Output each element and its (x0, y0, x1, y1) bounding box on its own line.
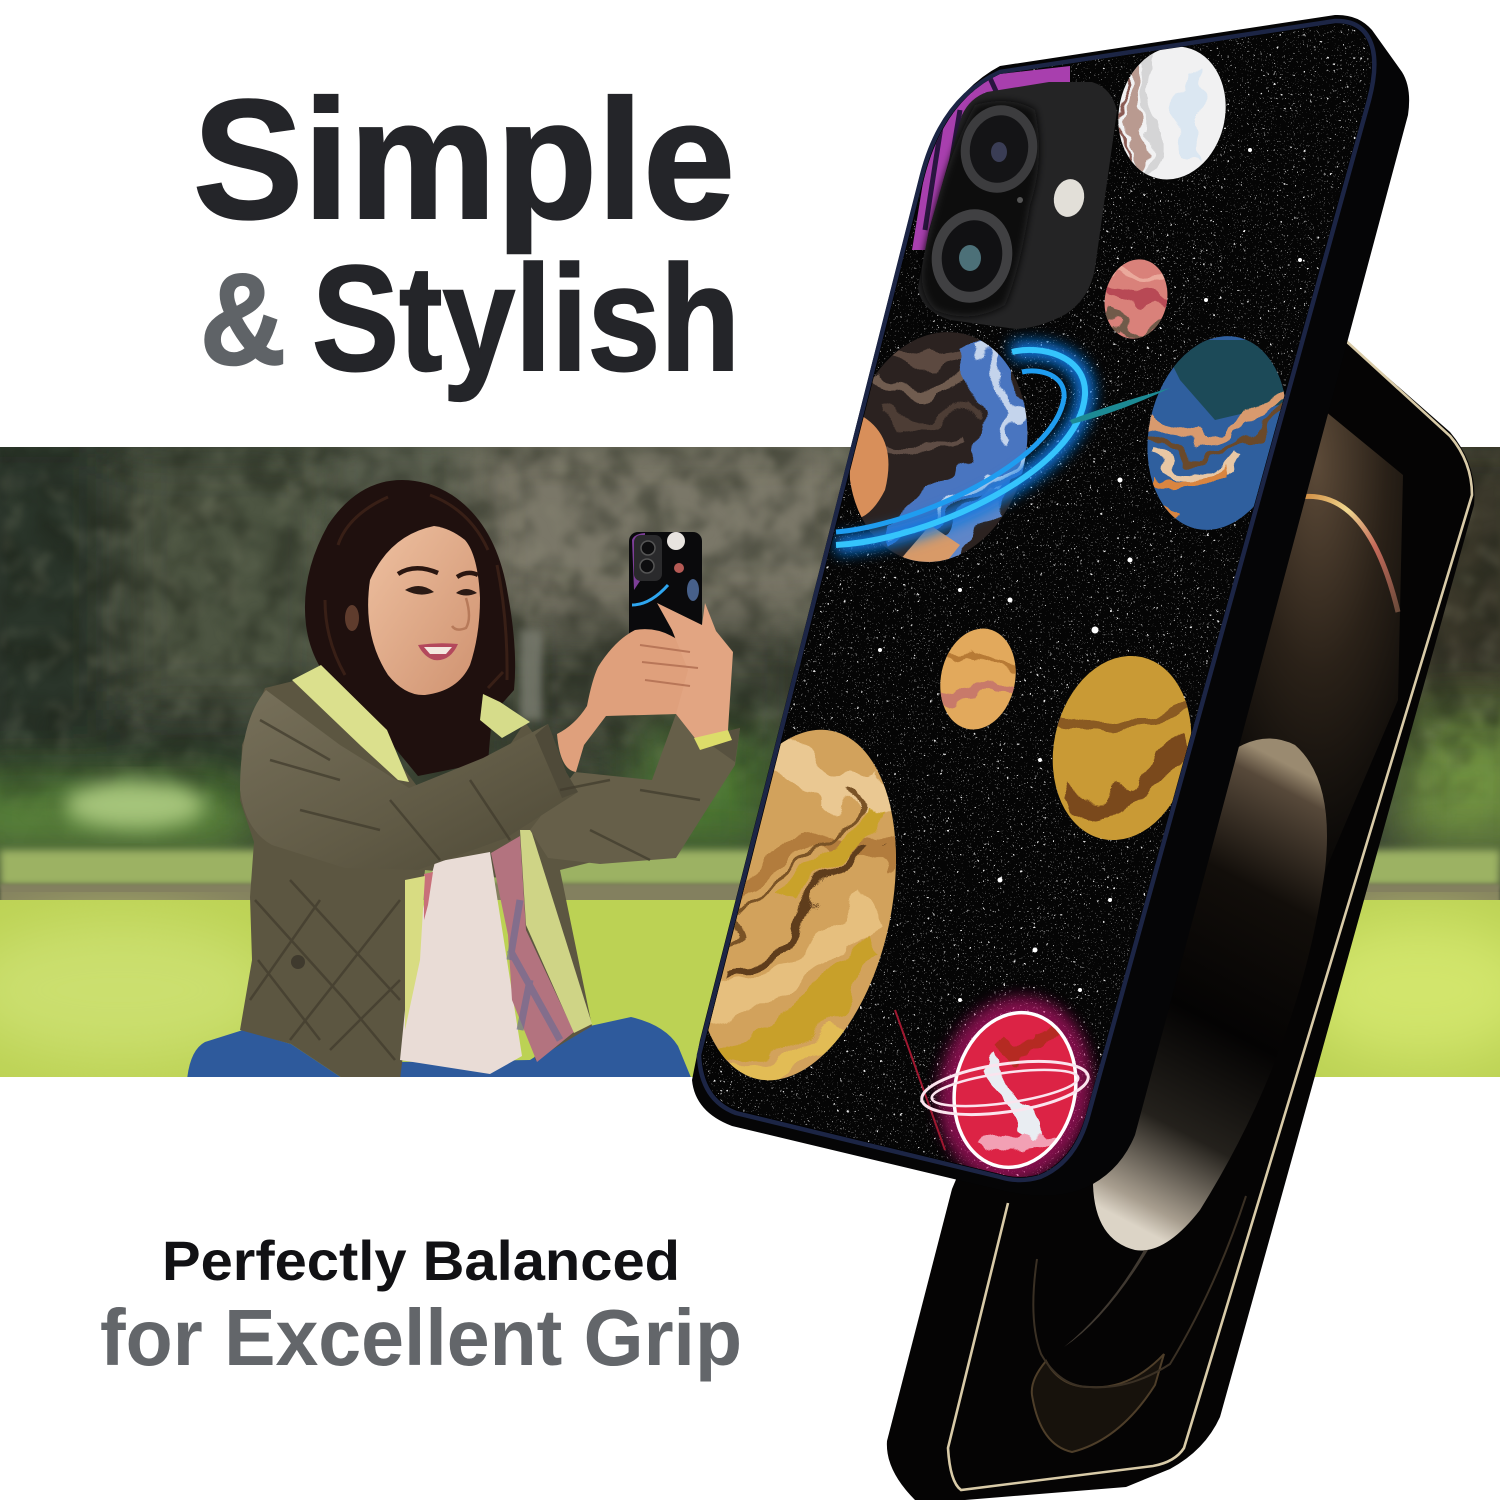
jacket quilting (250, 720, 700, 1060)
phone case (680, 10, 1409, 1200)
camera module (918, 82, 1117, 329)
woman taking a photo (187, 480, 740, 1080)
white shirt (400, 852, 522, 1074)
lens top (953, 98, 1045, 200)
wallpaper lobe (1093, 738, 1327, 1250)
jacket lining left (405, 876, 425, 1030)
hair (305, 480, 515, 776)
heading: Simple & Stylish (193, 65, 740, 402)
collar left (292, 665, 409, 782)
gold frame (948, 340, 1472, 1490)
hands (557, 629, 688, 772)
wallpaper glow (1230, 411, 1403, 930)
collar right (480, 694, 530, 738)
comet trail (1070, 388, 1170, 424)
ear (345, 605, 359, 631)
heading word Simple: Simple (193, 65, 735, 255)
far sleeve (530, 714, 740, 864)
heading word Stylish: Stylish (312, 234, 740, 402)
rainbow arc (1300, 496, 1398, 612)
inner rim (699, 21, 1374, 1180)
planet: mustard marble (1052, 656, 1192, 840)
printed back panel (680, 10, 1390, 1200)
planet: large gold marble (708, 730, 896, 1080)
side button (870, 312, 894, 382)
phone body (887, 340, 1474, 1500)
eyebrows and eyes (398, 568, 478, 577)
planet: small orange marble (940, 628, 1016, 730)
case body (692, 15, 1409, 1196)
pocket button (291, 955, 305, 969)
planet: brown and blue marble (849, 332, 1028, 562)
planet: small red marble (1104, 259, 1168, 339)
hair highlights (325, 495, 507, 688)
photo band: park scene (0, 420, 1500, 1090)
flash (1050, 176, 1088, 220)
microphone dot (1017, 197, 1023, 203)
middle wallpaper curve (1033, 1196, 1246, 1387)
lens bottom (923, 202, 1021, 310)
ampersand: & (200, 246, 286, 392)
lower wallpaper lobe (1032, 1354, 1164, 1452)
mini phone (629, 532, 702, 638)
back phone (887, 340, 1474, 1500)
near sleeve (240, 690, 578, 870)
planet: blue and orange marble (1147, 336, 1284, 530)
tagline line one: Perfectly Balanced (162, 1229, 680, 1292)
jacket lining right (520, 830, 592, 1033)
planet: white marble (1118, 46, 1226, 180)
face (368, 526, 480, 695)
starfield (680, 10, 1390, 1200)
purple corner print (912, 66, 1070, 250)
tagline: Perfectly Balanced for Excellent Grip (100, 1229, 742, 1382)
nose shading (452, 598, 469, 630)
mouth (418, 643, 458, 660)
jacket body (240, 672, 600, 1080)
jeans (187, 1017, 692, 1080)
light beam (1064, 1250, 1148, 1347)
tagline line two: for Excellent Grip (100, 1293, 742, 1382)
lens surround (922, 101, 1039, 316)
watch band (694, 730, 732, 750)
neon ring planet (894, 988, 1100, 1177)
park background (0, 420, 1500, 1090)
plaid shirt (491, 836, 574, 1062)
neon blue ring (836, 350, 1085, 545)
